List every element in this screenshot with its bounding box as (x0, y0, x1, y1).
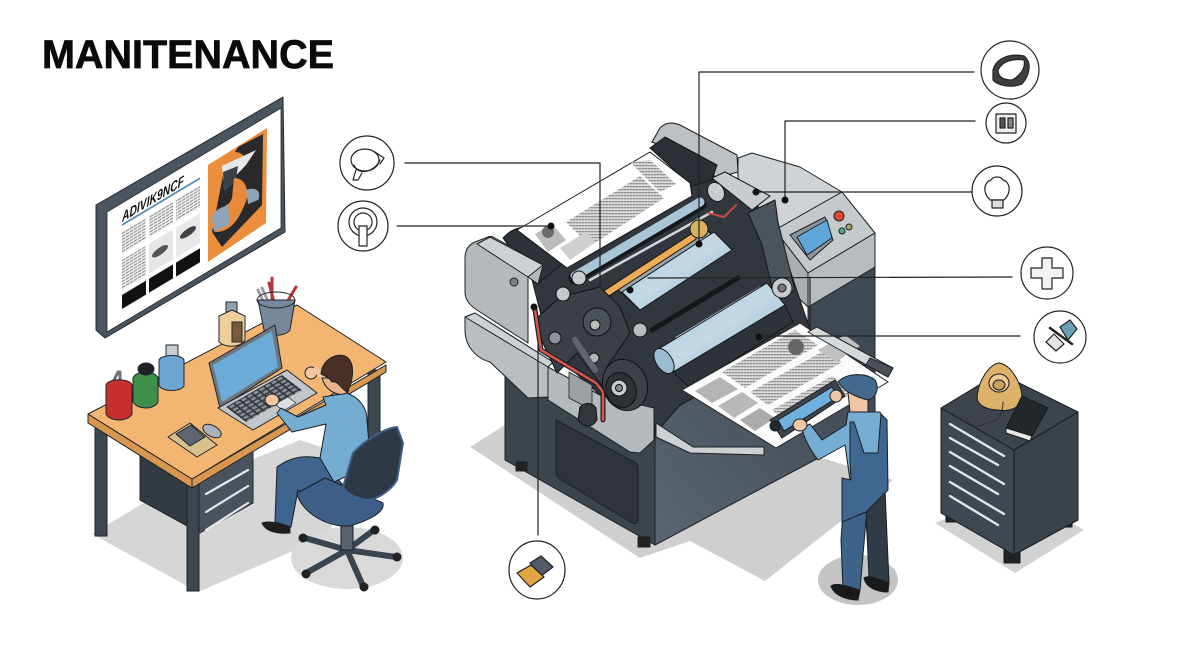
leader line: top right 2 (785, 121, 975, 200)
chair seat (297, 478, 383, 526)
inner gray window (569, 372, 592, 410)
black case (1006, 396, 1048, 441)
chair (297, 427, 403, 591)
gray front frame (548, 367, 654, 453)
worker floor shadow (818, 555, 898, 605)
desk (88, 305, 386, 591)
monitor document (121, 163, 200, 309)
orange bar (607, 237, 693, 293)
seated person (262, 355, 372, 533)
worker hands (793, 419, 807, 431)
cabinet slanted face (775, 192, 875, 273)
icon: connector (509, 541, 565, 599)
blue bottle (159, 345, 184, 390)
cabinet feet (946, 510, 1072, 563)
leader line: top right 1 (699, 72, 974, 244)
rear bearing (704, 179, 728, 205)
orange gear (690, 220, 708, 238)
leader dots (530, 188, 788, 340)
icon: circuit module (986, 103, 1026, 143)
control bezel (790, 217, 833, 260)
worker legs (841, 492, 889, 590)
person torso (277, 393, 369, 482)
thin rollers (575, 202, 760, 338)
red cables (535, 205, 736, 420)
control cabinet (738, 153, 875, 395)
person shoe (262, 522, 290, 533)
feed tray (656, 423, 764, 455)
lower side plate (465, 313, 553, 398)
gear mechanism (538, 287, 647, 387)
leader line: left top (405, 163, 600, 285)
middle roller (607, 220, 732, 310)
base right face (655, 290, 875, 545)
small pivot (578, 403, 597, 426)
leader line: right 5 (760, 335, 1020, 337)
cabinet shadow (935, 490, 1084, 573)
overalls (842, 414, 888, 522)
cabinet top (738, 153, 842, 230)
worker shirt and arm (802, 412, 887, 480)
tan bag (966, 363, 1022, 426)
chair back (343, 427, 403, 500)
control screen (797, 220, 832, 255)
tool cabinet (935, 363, 1084, 573)
chair base (299, 520, 401, 591)
rear gray cover (652, 123, 738, 178)
person hand left (265, 394, 279, 406)
computer mouse (201, 421, 223, 441)
drive pulley (595, 353, 655, 417)
control buttons (834, 211, 852, 234)
wall monitor (96, 97, 285, 338)
machine floor shadow (470, 420, 893, 581)
drawer cabinet (140, 448, 253, 534)
icon: bulb (972, 166, 1022, 216)
cabinet drawer handles (950, 424, 1004, 525)
person hand right (305, 367, 317, 379)
printed sheet (682, 323, 888, 448)
person legs (275, 457, 372, 527)
left bearing (572, 271, 586, 285)
icon: bracket ring (340, 136, 394, 190)
roller frame (530, 123, 812, 428)
worker cap (838, 375, 877, 400)
machine left block (465, 236, 553, 398)
front roller (650, 278, 793, 388)
laptop (209, 325, 317, 430)
leader line: right 3 (756, 191, 972, 193)
worker shoes (831, 577, 889, 600)
icon: round seal (338, 201, 388, 251)
frame right pillar (748, 200, 795, 300)
monitor document: ADIVIK9NCF (121, 173, 184, 226)
beige bottle (219, 302, 245, 346)
icon: fitting (1034, 311, 1086, 363)
leader line: left lower (397, 225, 551, 227)
icon: cross (1021, 247, 1073, 299)
held tool (770, 380, 845, 438)
leader line: bottom (537, 345, 539, 535)
base left face (505, 360, 655, 545)
machine base (505, 290, 875, 547)
base access panel (556, 420, 638, 524)
desk leg back (368, 370, 380, 442)
machine feet (516, 462, 650, 547)
green container (133, 363, 158, 408)
desk tool tray (168, 423, 217, 457)
side rail (808, 327, 893, 377)
worker head (848, 392, 868, 412)
desk floor shadow (92, 440, 345, 592)
leader line: right 4 (648, 277, 1012, 330)
desk leg left (95, 426, 107, 536)
person head (321, 355, 353, 394)
worker (770, 375, 898, 605)
rail end (866, 358, 893, 377)
upper side plate (465, 236, 543, 343)
title: MANITENANCE (42, 33, 334, 77)
icon: gasket (981, 41, 1039, 99)
pencil cup (257, 278, 296, 335)
desk top (88, 305, 386, 488)
red cup (106, 372, 132, 420)
monitor orange poster (208, 128, 267, 262)
desk leg front (187, 478, 199, 591)
chair floor shadow (291, 527, 403, 589)
paper roll (503, 152, 692, 284)
